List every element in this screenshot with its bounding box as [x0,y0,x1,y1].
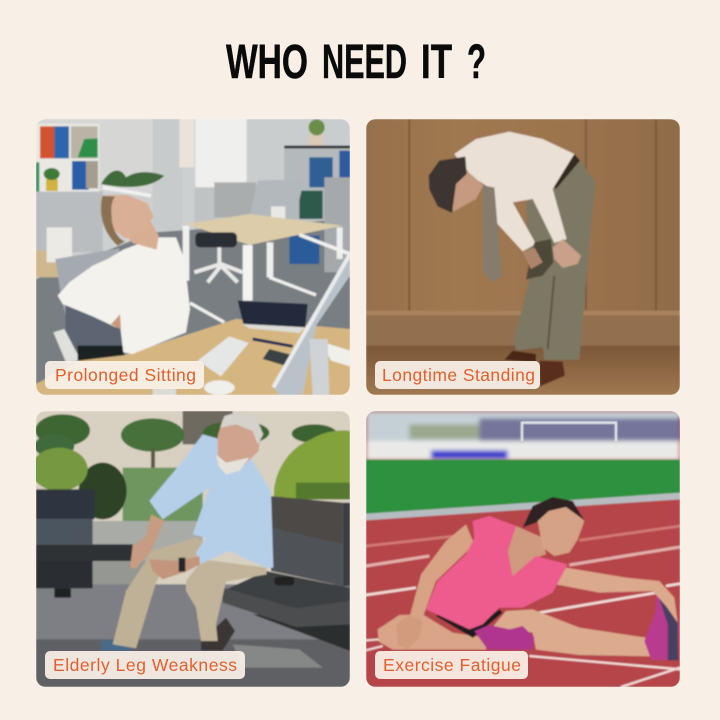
head [218,415,261,473]
face [538,506,584,556]
label: exercise fatigue [375,651,528,679]
trousers [514,159,595,360]
foreground desk [36,319,350,395]
title: WHO [226,36,308,89]
right shelf [284,119,350,272]
back desk [183,179,343,322]
label: prolonged sitting [45,361,204,389]
monitor [103,187,350,395]
chair [53,248,124,362]
label: prolonged sitting: Prolonged Sitting [55,365,196,385]
hair [523,497,584,528]
track lines [366,496,680,687]
panel: exercise fatigue [366,411,680,687]
hands [523,239,581,280]
concrete wall [93,521,203,563]
left planter and bench [36,489,133,598]
right planter and bench [223,496,350,651]
back arm [409,524,474,619]
shorts [438,611,501,635]
background building and bushes [31,411,350,521]
label: elderly leg weakness: Elderly Leg Weakness [53,655,237,675]
athlete [378,497,679,660]
whiteboard [195,119,247,187]
title: IT [421,36,452,89]
label: elderly leg weakness [45,651,245,679]
keyboard [198,336,249,376]
tie [483,186,502,282]
label: longtime standing: Longtime Standing [382,365,535,385]
hand on shoe and arm [556,568,678,623]
neck and chest [508,526,546,579]
panel: elderly leg weakness [31,411,350,687]
hand on knee [396,615,423,649]
bending man [429,132,595,386]
plant [101,171,164,187]
title: ? [467,36,486,89]
extended leg [493,609,650,656]
far shoe and leg [101,639,133,651]
pink top [426,516,568,629]
belt [551,154,580,189]
near shoe and leg [201,618,235,650]
grass [366,460,680,514]
far shoe [644,594,679,660]
blurred stadium [366,411,680,460]
bent leg [378,614,486,650]
shoes [504,351,536,362]
desk items [153,339,350,395]
shirt [149,434,273,568]
laptop [238,301,308,333]
woman [58,195,190,354]
near shoe [474,625,534,650]
label: longtime standing [375,361,540,389]
title [226,36,486,89]
ground [36,584,350,687]
elderly man [101,412,273,651]
goal [522,423,616,441]
shirt [454,132,574,251]
bookshelf [36,124,99,192]
left monitor and desk [36,227,72,277]
label: exercise fatigue: Exercise Fatigue [383,655,521,675]
panel: longtime standing [366,119,680,395]
title: NEED [322,36,407,89]
panel: prolonged sitting [36,119,350,395]
skin arm and hands [130,514,164,568]
head [452,171,484,212]
